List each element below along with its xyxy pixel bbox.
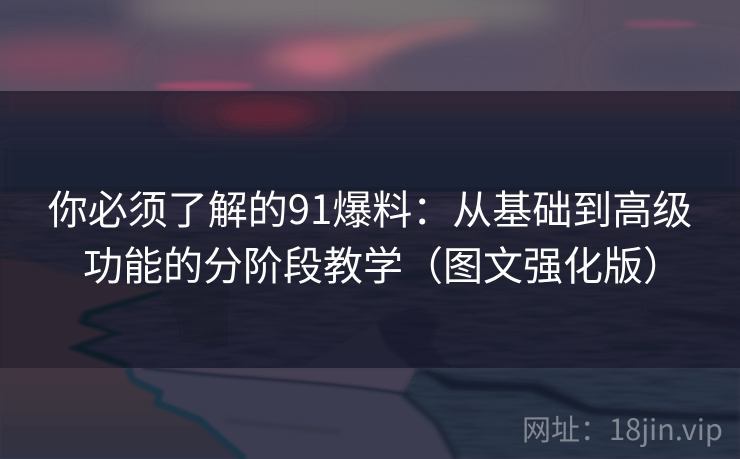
sky [0,0,740,91]
title line 1: 你必须了解的91爆料：从基础到高级 [48,178,692,236]
dark sea band with red reflection [2,91,738,188]
watermark: site address: 网址：18jin.vip [522,407,723,449]
title line 2: 功能的分阶段教学（图文强化版） [83,234,683,292]
foam patches and shoreline edges [68,271,740,368]
lower beach band [0,366,740,459]
shore water [0,189,740,368]
wet sand lower left [0,250,160,370]
ripple texture on the water [0,190,740,370]
